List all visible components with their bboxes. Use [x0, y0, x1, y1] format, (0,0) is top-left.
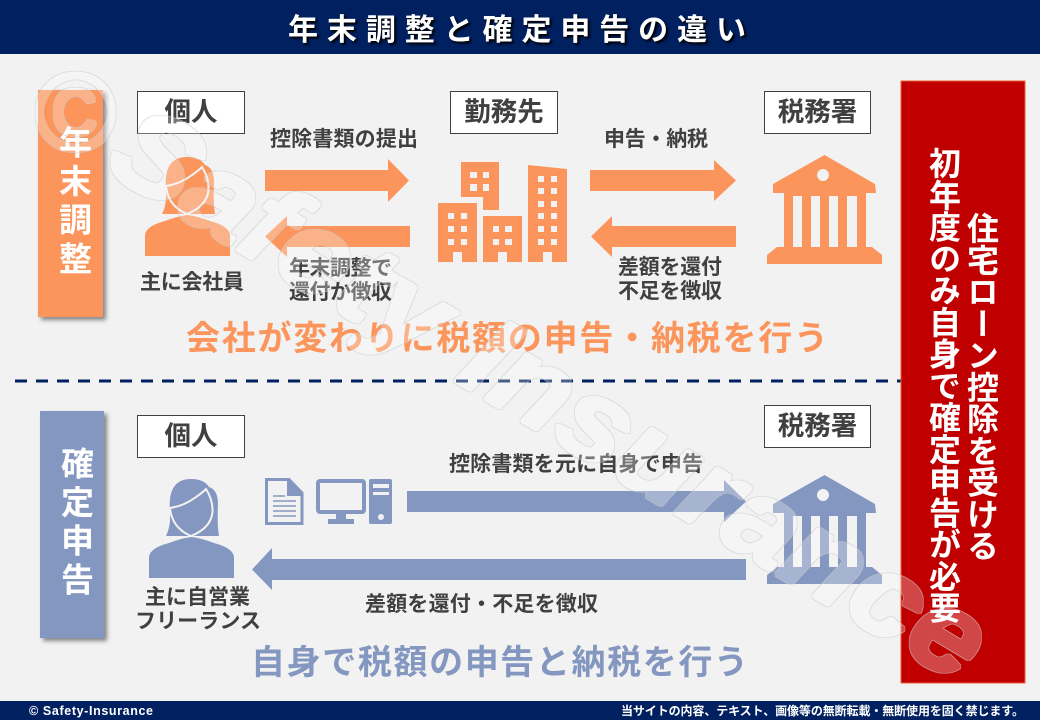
box: 勤務先 [450, 92, 558, 134]
text: 主に会社員: 主に会社員 [140, 271, 244, 294]
label: 年末調整で還付か徴収: 還付か徴収 [289, 281, 392, 304]
label: 主に自営業 フリーランス: フリーランス [135, 610, 261, 633]
callout: 住宅ローン控除: 初年度のみ自身で確定申告が必要 [925, 147, 961, 624]
watermark: © Safety Insurance: © [35, 51, 116, 174]
icon: office buildings [438, 162, 567, 262]
box: 個人 [138, 92, 244, 134]
footer: © Safety-Insurance [29, 704, 153, 718]
box: 税務署: 税務署 [778, 411, 857, 441]
callout: 住宅ローン控除 [901, 81, 1025, 683]
box: 税務署 [764, 406, 870, 448]
panel: 年末調整 [38, 90, 882, 358]
title banner [0, 0, 1040, 54]
icon: woman employee [145, 157, 230, 256]
side label: 確定申告: 確定申告 [56, 446, 94, 601]
icon: tax office [767, 475, 882, 584]
box: 税務署 [764, 92, 870, 134]
label: 差額を還付・不足を徴収: 差額を還付・不足を徴収 [365, 593, 598, 616]
arrow: 差額を還付・不足を徴収 [252, 548, 746, 590]
box: 勤務先: 勤務先 [464, 97, 544, 127]
icon: woman freelancer [149, 479, 234, 578]
side label: 年末調整 [38, 90, 103, 317]
arrow: 申告・納税 [590, 160, 736, 201]
side label: 確定申告 [40, 411, 104, 638]
box: 個人: 個人 [164, 97, 218, 127]
title banner: 年末調整と確定申告の違い [288, 14, 746, 47]
arrow: 控除書類の提出 [265, 159, 409, 202]
label: 主に自営業 フリーランス [135, 586, 261, 633]
arrow: 差額を還付 [591, 216, 736, 257]
summary: 会社が変わりに税額の申告・納税を行う: 会社が変わりに税額の申告・納税を行う [186, 319, 828, 358]
panel: 確定申告 [40, 406, 882, 682]
label: 申告・納税: 申告・納税 [604, 128, 708, 151]
watermark: © Safety Insurance: Safety Insurance [89, 82, 1012, 705]
label: 控除書類を元に自身で申告: 控除書類を元に自身で申告 [449, 453, 703, 476]
label: 控除書類の提出: 控除書類の提出 [270, 128, 418, 151]
label: 主に自営業 フリーランス: 主に自営業 [145, 586, 250, 609]
footer: 当サイトの内容、テキスト、画像等の無断転載・無断使用を固く禁じます。 [621, 703, 1024, 718]
arrow: 年末調整で還付か徴収 [265, 216, 410, 257]
label: 差額を還付 不足を徴収: 差額を還付 [618, 256, 722, 279]
arrow: 控除書類を元に自身で申告 [407, 480, 746, 522]
summary: 自身で税額の申告と納税を行う: 自身で税額の申告と納税を行う [251, 644, 748, 682]
label: 差額を還付 不足を徴収: 不足を徴収 [618, 280, 722, 303]
label: 年末調整で還付か徴収 [289, 257, 392, 304]
footer [0, 701, 1040, 720]
side label: 年末調整: 年末調整 [54, 126, 92, 280]
icon: tax office [767, 155, 882, 264]
box: 個人 [138, 416, 244, 458]
callout: 住宅ローン控除: 住宅ローン控除を受ける [963, 212, 999, 561]
label: 差額を還付 不足を徴収 [618, 256, 722, 303]
label: 年末調整で還付か徴収: 年末調整で [289, 257, 392, 280]
box: 税務署: 税務署 [778, 97, 857, 127]
box: 個人: 個人 [164, 421, 218, 451]
icon: document [266, 479, 303, 524]
icon: computer [318, 479, 392, 524]
